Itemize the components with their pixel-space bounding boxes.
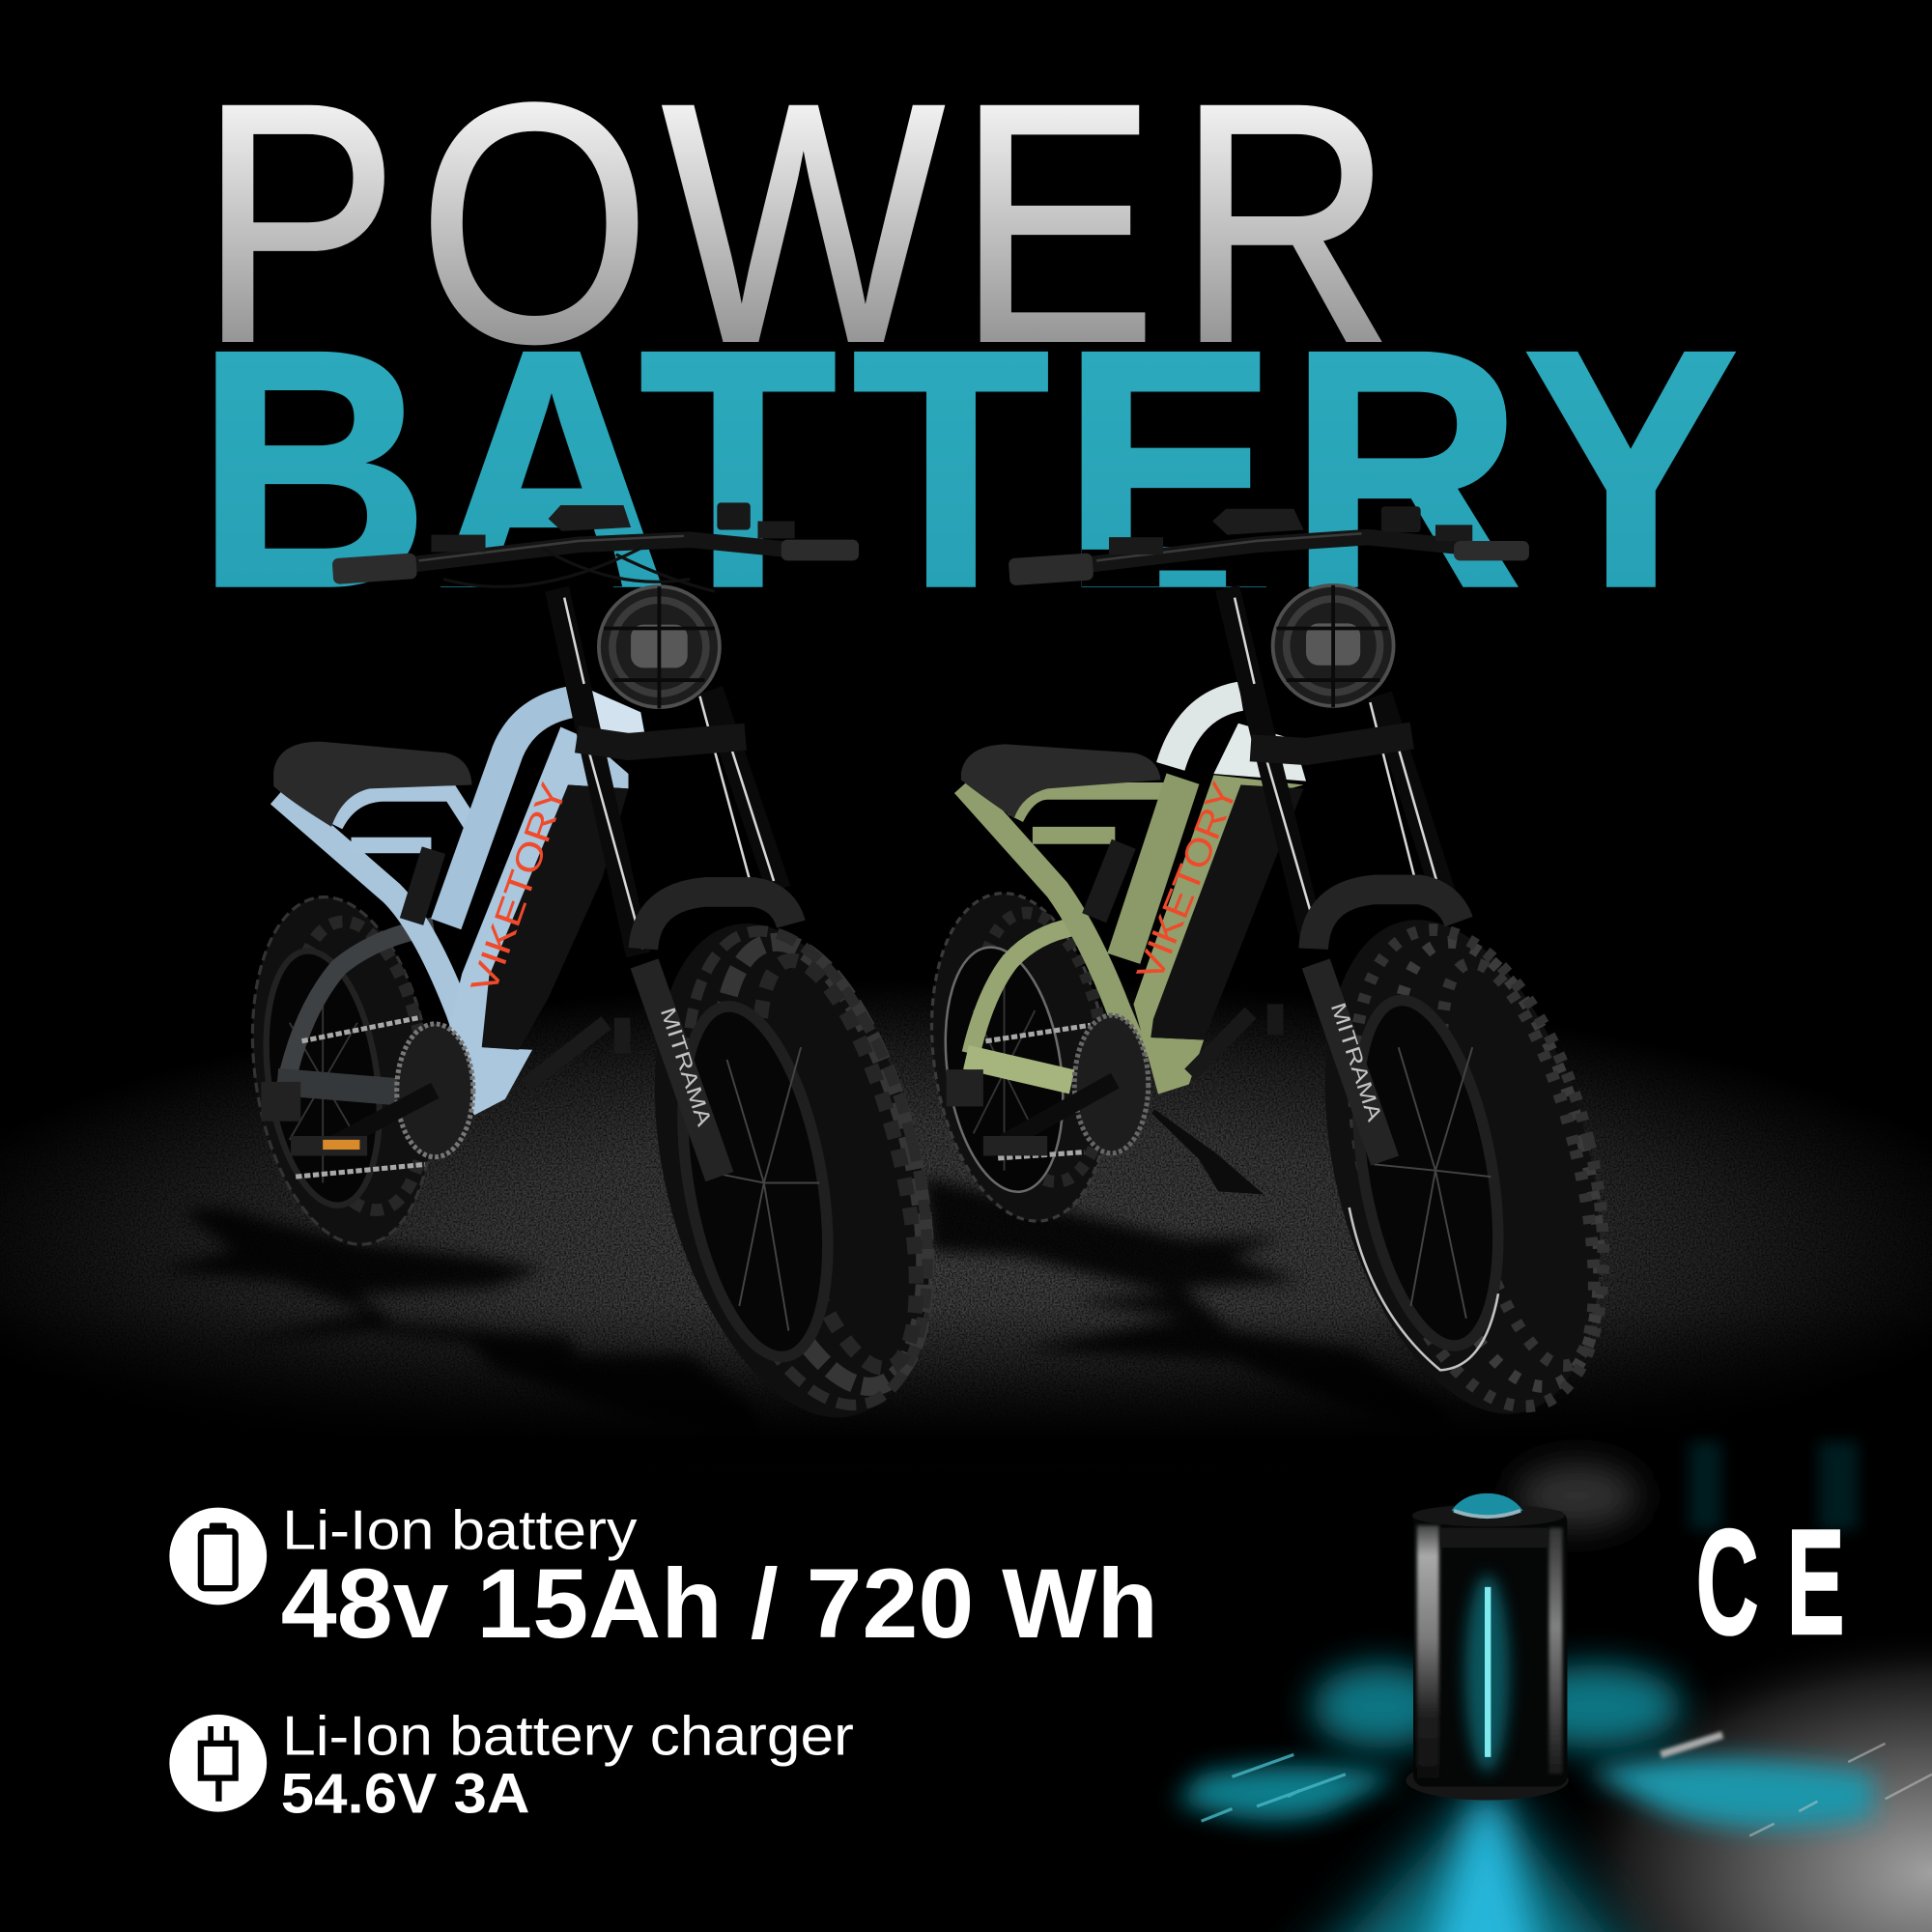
spec: battery label: Li-Ion battery [282, 1499, 638, 1561]
shock absorber [412, 850, 434, 922]
bike: blue [232, 502, 977, 1446]
headlight [599, 586, 720, 708]
front wheel [608, 895, 977, 1446]
kickstand [1153, 1112, 1257, 1191]
seat tube [1123, 779, 1182, 958]
crossbar and far pedal [527, 1018, 622, 1084]
handlebar [332, 502, 859, 591]
spec: charger label: Li-Ion battery charger [282, 1705, 854, 1767]
rear frame rail [963, 784, 1140, 1060]
teal glow behind [1312, 1664, 1682, 1748]
chain [296, 1018, 425, 1177]
headlight [1273, 585, 1394, 707]
battery base [1406, 1761, 1569, 1801]
triple clamp [1251, 735, 1412, 752]
bike: green [912, 506, 1648, 1442]
frame panel [1133, 775, 1303, 1094]
teal floor glow left [1177, 1766, 1399, 1820]
battery glow [1465, 1575, 1509, 1772]
battery illustration [1177, 1441, 1932, 1932]
dim background light [1516, 1441, 1858, 1530]
seat support rails [335, 793, 473, 845]
seat tube [446, 702, 569, 924]
grey floor light [1516, 1614, 1932, 1932]
icon: plug [169, 1715, 267, 1812]
fork text: MITRAMA [1326, 1000, 1387, 1124]
rear swing arm [286, 926, 434, 1084]
front fork tubes [557, 589, 779, 955]
brand text: VIKETORY [463, 778, 575, 999]
battery light line [1485, 1587, 1491, 1757]
rear wheel [232, 885, 453, 1256]
spec: charger value: 54.6V 3A [281, 1762, 529, 1825]
shock absorber [1094, 844, 1123, 918]
seat [273, 742, 472, 827]
rear frame rail [278, 795, 483, 1084]
chainring and crank [261, 1024, 473, 1157]
battery pack [482, 784, 629, 1050]
floor glints [1202, 1754, 1346, 1821]
triple clamp [577, 737, 746, 747]
battery pack [1151, 784, 1303, 1040]
handlebar [1009, 506, 1529, 585]
handlebar letter occlusion [1082, 550, 1303, 586]
seat [961, 744, 1161, 818]
battery body [1413, 1511, 1567, 1786]
brand text: VIKETORY [1129, 777, 1246, 986]
teal floor beam [1269, 1797, 1676, 1932]
title: BATTERY: BATTERY [195, 279, 1740, 658]
head tube [1213, 724, 1306, 781]
CE mark: CE [1696, 1498, 1845, 1665]
head tube [577, 685, 647, 754]
frame panel [441, 727, 629, 1115]
fender and fork leg [643, 892, 791, 1177]
front wheel [1278, 891, 1648, 1442]
chainring and crank [947, 1015, 1149, 1155]
battery top cap [1412, 1493, 1565, 1526]
seat support rails [1015, 791, 1164, 836]
white upper tube [1171, 696, 1240, 766]
handlebar letter occlusion [419, 550, 622, 586]
chain [985, 1025, 1091, 1158]
teal floor glow right [1587, 1758, 1873, 1829]
crossbar and far pedal [1190, 1005, 1275, 1074]
front fork tubes [1227, 587, 1444, 933]
ground with shadows [0, 980, 1932, 1466]
icon: battery [169, 1508, 267, 1605]
fork text: MITRAMA [656, 1005, 717, 1129]
title: POWER: POWER [200, 35, 1393, 412]
swing arm [971, 926, 1074, 1054]
fender and fork leg [1314, 890, 1459, 1161]
spec: battery value: 48v 15Ah / 720 Wh [281, 1548, 1158, 1659]
rear wheel [912, 882, 1128, 1233]
